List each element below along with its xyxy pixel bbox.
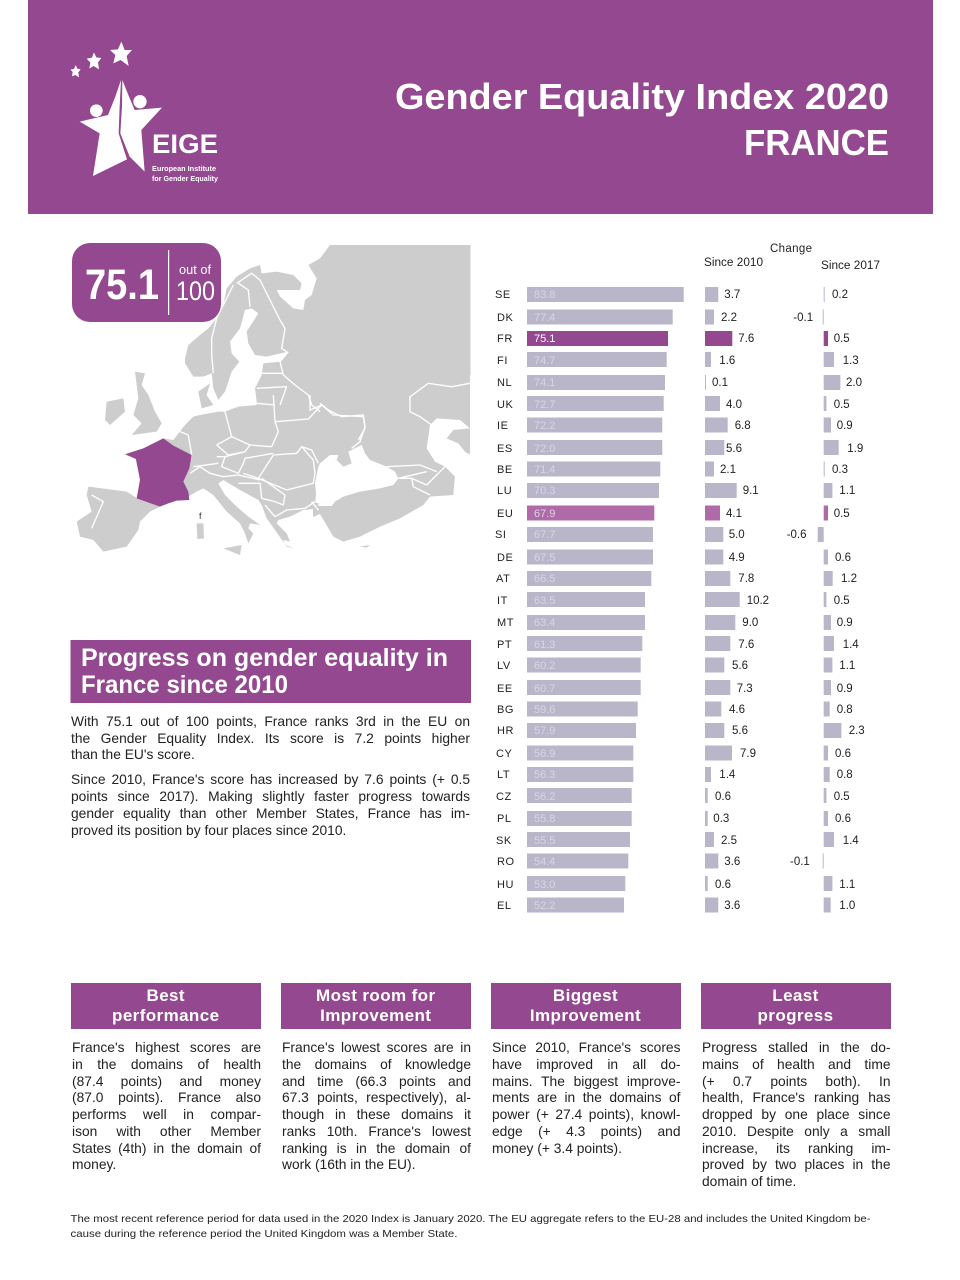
row: UK: 0.5 [834,399,850,411]
text: best performance: money. [72,1157,116,1172]
map: central and Balkan borders [92,395,365,528]
text: least progress: dropped by one place since [702,1107,890,1122]
map: eastern borders [320,383,470,495]
heading: progress on gender equality: Progress on gender equality in [81,644,448,672]
row: CY: 56.9 [534,748,555,760]
row: BE: BE [497,464,513,476]
row: FI: 1.3 [843,355,859,367]
row: FI: 74.7 [534,355,555,367]
logo: EIGE: European Institute [152,166,216,173]
text block: progress description: With 75.1 out of 100 points, France ranks 3rd in the EU on [71,714,470,729]
text: most room for improvement: ranking is in the domain of [282,1140,471,1156]
row: DE [497,550,851,564]
map: Black Sea and Caspian Sea [315,418,477,506]
row: MT [497,615,853,630]
text block: progress description: the Gender Equality Index. Its score is 7.2 points higher [71,731,470,746]
row: LV: LV [497,660,511,672]
row: ES: 72.0 [534,443,555,455]
heading: least progress [700,983,890,1029]
row: IE [497,418,853,432]
text: biggest improvement: power (+ 27.4 points), knowl- [492,1107,680,1122]
text: least progress: proved by two places in the [702,1157,890,1172]
row: CY: 0.6 [835,748,851,760]
row: HU: 1.1 [839,879,855,891]
title [395,76,889,163]
row: CZ: CZ [496,791,512,803]
row: ES [497,440,863,455]
row: LT: 0.8 [837,769,853,781]
row: EL [497,898,855,912]
row: DK: 2.2 [721,312,737,324]
row: LV: 5.6 [732,660,748,672]
map: Mediterranean islands [197,523,370,555]
chart column headers: Since 2017 [821,260,880,272]
row: EE: 7.3 [737,683,753,695]
map: Denmark [198,383,213,408]
row: PT [497,636,859,651]
row: FR: FR [497,333,513,345]
text: best performance: in the domains of health [72,1057,261,1072]
row: UK: 4.0 [726,399,742,411]
row: IT: IT [497,595,508,607]
row: RO [497,854,824,868]
row: IE: 6.8 [735,420,751,432]
row: IT: 63.5 [534,595,555,607]
heading: most room for improvement: Most room for [316,986,435,1005]
row: NL [497,375,862,390]
row: RO: 54.4 [534,856,555,868]
row: EE: EE [497,683,513,695]
row: FI: 1.6 [719,355,735,367]
row: PT: 7.6 [738,639,754,651]
row: MT: 9.0 [742,617,758,629]
row: SI: 67.7 [534,529,555,541]
row: BG [497,702,853,716]
row: HU: 0.6 [715,879,731,891]
text: best performance: ison with other Member [72,1124,261,1139]
map: continental Europe [77,395,380,552]
row: MT: 63.4 [534,617,555,629]
panel: biggest improvement [491,983,681,1156]
text: most room for improvement: France's lowest scores are in [282,1040,471,1055]
row: HR: 57.9 [534,725,555,737]
row: NL: 2.0 [846,377,862,389]
row: EE: 60.7 [534,683,555,695]
text: most room for improvement: though in these domains it [282,1107,471,1122]
row: IT: 10.2 [747,595,769,607]
heading: best performance: performance [112,1006,219,1025]
row: BG: 59.6 [534,704,555,716]
text: most room for improvement: ranks 10th. France's lowest [282,1124,471,1139]
text: most room for improvement [282,1040,471,1172]
row: FR: 75.1 [534,333,555,345]
row: SE: 3.7 [724,289,740,301]
text: most room for improvement: 67.3 points, respectively), al- [282,1090,471,1105]
text: least progress: increase, its ranking im- [702,1140,890,1156]
row: FI [497,352,859,367]
row: LV: 60.2 [534,660,555,672]
text: least progress: domain of time. [702,1174,796,1189]
footnote: cause during the reference period the United Kingdom was a Member State. [70,1228,458,1240]
row: IT [497,592,850,607]
row: DK: DK [497,312,514,324]
row: HU [497,876,855,891]
text: least progress: 2010. Despite only a small [702,1124,890,1139]
row: EU [497,506,850,520]
map: Russia south, Caucasus, Turkey [313,370,470,542]
title: FRANCE [744,122,889,163]
row: PL: 55.8 [534,813,555,825]
row: BE [497,462,848,476]
row: HR: HR [497,725,514,737]
row: SI: 5.0 [729,529,745,541]
header banner [28,0,933,214]
row: CZ: 0.6 [715,791,731,803]
row: LU [497,483,855,498]
row: AT: 7.8 [738,573,754,585]
row: LU: 1.1 [839,485,855,497]
text: least progress: Progress stalled in the do- [702,1040,890,1055]
row: PT: 61.3 [534,639,555,651]
row: EU: 67.9 [534,508,555,520]
row: LT [497,767,853,782]
row: EL: 1.0 [839,900,855,912]
row: EU: 0.5 [834,508,850,520]
text: most room for improvement: the domains of knowledge [282,1057,471,1072]
panel: best performance [71,983,261,1172]
text block: progress description: points since 2017). Making slightly faster progress towards [71,789,470,804]
footnote [70,1213,871,1240]
row: SK [496,832,859,847]
heading: best performance [70,983,261,1029]
text: biggest improvement [492,1040,680,1156]
heading: most room for improvement [280,983,471,1029]
row: DK: -0.1 [793,312,813,324]
text: biggest improvement: mains. The biggest improve- [492,1074,680,1088]
text: least progress [702,1040,890,1189]
map: France highlighted [125,438,192,507]
row: DE: DE [497,552,513,564]
row: UK: 72.7 [534,399,555,411]
row: EL: EL [497,900,512,912]
score badge: 75.1 out of 100: 75.1 [85,261,159,309]
row: PT: PT [497,639,512,651]
row: FR: 0.5 [834,333,850,345]
text: best performance: States (4th) in the domain of [72,1140,261,1156]
row: FR [497,331,850,346]
row: SI: -0.6 [787,529,807,541]
row: PL: 0.6 [835,813,851,825]
row: PL: 0.3 [713,813,729,825]
text: best performance [72,1040,261,1172]
heading: biggest improvement [490,983,680,1029]
row: EU: EU [497,508,513,520]
row: BE: 71.4 [534,464,555,476]
row: RO: RO [497,856,515,868]
text block: progress description: gender equality than other Member States, France has im- [71,806,470,821]
row: PL [497,811,851,826]
text: least progress: mains of health and time [702,1057,890,1072]
heading: most room for improvement: Improvement [320,1006,431,1025]
text: best performance: performs well in compar- [72,1107,261,1122]
text: biggest improvement: edge (+ 4.3 points) and [492,1124,680,1139]
row: CZ [496,788,850,803]
row: LT: 1.4 [719,769,736,781]
row: LU: LU [497,485,512,497]
row: SE: 83.8 [534,289,555,301]
row: AT: AT [496,573,510,585]
row: AT: 1.2 [841,573,857,585]
row: SE: SE [495,289,511,301]
row: LU: 70.3 [534,485,555,497]
map: Scandinavia, Finland, Baltics [185,245,337,415]
text: best performance: (87.0 points). France also [72,1090,261,1105]
row: NL: 0.1 [712,377,728,389]
chart column headers [704,243,880,272]
row: FR: 7.6 [738,333,754,345]
heading: progress on gender equality: France since 2010 [81,671,288,699]
text: best performance: (87.4 points) and money [72,1074,261,1088]
row: CY: CY [496,748,513,760]
score badge: 75.1 out of 100: out of [179,262,211,277]
logo: EIGE: EIGE [152,129,218,159]
text: biggest improvement: have improved in all do- [492,1057,680,1072]
row: PL: PL [497,813,512,825]
row: LT: LT [497,769,510,781]
row: AT [496,571,857,586]
row: IE: IE [497,420,509,432]
row: EL: 52.2 [534,900,555,912]
row: HU: HU [497,879,514,891]
text block: progress description: Since 2010, France's score has increased by 7.6 points (+ 0.5 [71,772,470,787]
text block: progress description: proved its position by four places since 2010. [71,823,346,838]
row: IE: 0.9 [837,420,853,432]
text block: progress description: than the EU's score. [71,747,195,762]
row: SI: SI [495,529,507,541]
row: UK [497,396,850,411]
row: BG: BG [497,704,514,716]
heading: best performance: Best [147,986,185,1005]
row: HR: 5.6 [732,725,748,737]
row: CZ: 0.5 [834,791,850,803]
row: ES: ES [497,443,513,455]
footnote: The most recent reference period for data used in the 2020 Index is January 2020. The EU aggregate refers to the EU-28 and includes the United Kingdom be- [70,1213,871,1225]
row: ES: 5.6 [726,443,742,455]
row: EU: 4.1 [726,508,742,520]
map of Europe: f [199,511,202,521]
row: ES: 1.9 [847,443,863,455]
row: NL: NL [497,377,512,389]
row: DE: 0.6 [835,552,851,564]
row: EE: 0.9 [837,683,853,695]
chart column headers: Change [770,243,812,255]
row: FI: FI [497,355,508,367]
row: LT: 56.3 [534,769,555,781]
row: IE: 72.2 [534,420,555,432]
logo: EIGE [70,42,218,183]
row: HR [497,723,865,738]
row: DK: 77.4 [534,312,555,324]
text: least progress: (+ 0.7 points both). In [702,1074,890,1088]
text: biggest improvement: ments are in the domains of [492,1090,680,1105]
row: DE: 4.9 [729,552,745,564]
score badge: 75.1 out of 100 [72,243,221,322]
row: SI [495,527,824,542]
row: BG: 4.6 [729,704,745,716]
chart column headers: Since 2010 [704,257,763,269]
text block: progress description [71,714,470,838]
row: BE: 0.3 [832,464,848,476]
text: best performance: France's highest scores are [72,1040,261,1055]
heading: biggest improvement: Biggest [553,986,618,1005]
row: NL: 74.1 [534,377,555,389]
row: HU: 53.0 [534,879,555,891]
row: BG: 0.8 [837,704,853,716]
text: most room for improvement: work (16th in the EU). [282,1157,415,1172]
text: most room for improvement: and time (66.3 points and [282,1074,471,1088]
map: British Isles [105,372,162,435]
title: Gender Equality Index 2020 [395,76,889,117]
heading: least progress: progress [758,1006,833,1025]
map of Europe [77,245,477,555]
row: SK: 1.4 [843,835,859,847]
row: HR: 2.3 [849,725,865,737]
map: northern borders [212,273,320,412]
heading: biggest improvement: Improvement [530,1006,641,1025]
row: EE [497,680,853,695]
row: SK: 55.5 [534,835,555,847]
row: BE: 2.1 [720,464,736,476]
row: UK: UK [497,399,514,411]
score badge: 75.1 out of 100: 100 [176,276,215,306]
row: RO: 3.6 [724,856,740,868]
row: SE [495,287,848,302]
row: AT: 66.5 [534,573,555,585]
row: EL: 3.6 [724,900,740,912]
row: CY: 7.9 [740,748,756,760]
row: RO: -0.1 [790,856,810,868]
logo: EIGE: for Gender Equality [152,176,218,183]
text: biggest improvement: money (+ 3.4 points). [492,1140,622,1156]
row: CY [496,746,851,760]
text: biggest improvement: Since 2010, France's scores [492,1040,680,1055]
row: LV: 1.1 [839,660,855,672]
row: SK: 2.5 [721,835,737,847]
row: LU: 9.1 [743,485,759,497]
heading: least progress: Least [772,986,819,1005]
row: MT: 0.9 [837,617,853,629]
row: DK [497,310,824,324]
chart: index scores and change by country [495,243,880,912]
row: PT: 1.4 [843,639,859,651]
row: SE: 0.2 [832,289,848,301]
row: IT: 0.5 [834,595,850,607]
row: LV [497,658,855,672]
panel: least progress [701,983,891,1189]
row: SK: SK [496,835,512,847]
row: MT: MT [497,617,514,629]
row: CZ: 56.2 [534,791,555,803]
heading: progress on gender equality [70,640,471,703]
panel: most room for improvement [281,983,471,1172]
text: least progress: health, France's ranking has [702,1090,890,1105]
row: DE: 67.5 [534,552,555,564]
